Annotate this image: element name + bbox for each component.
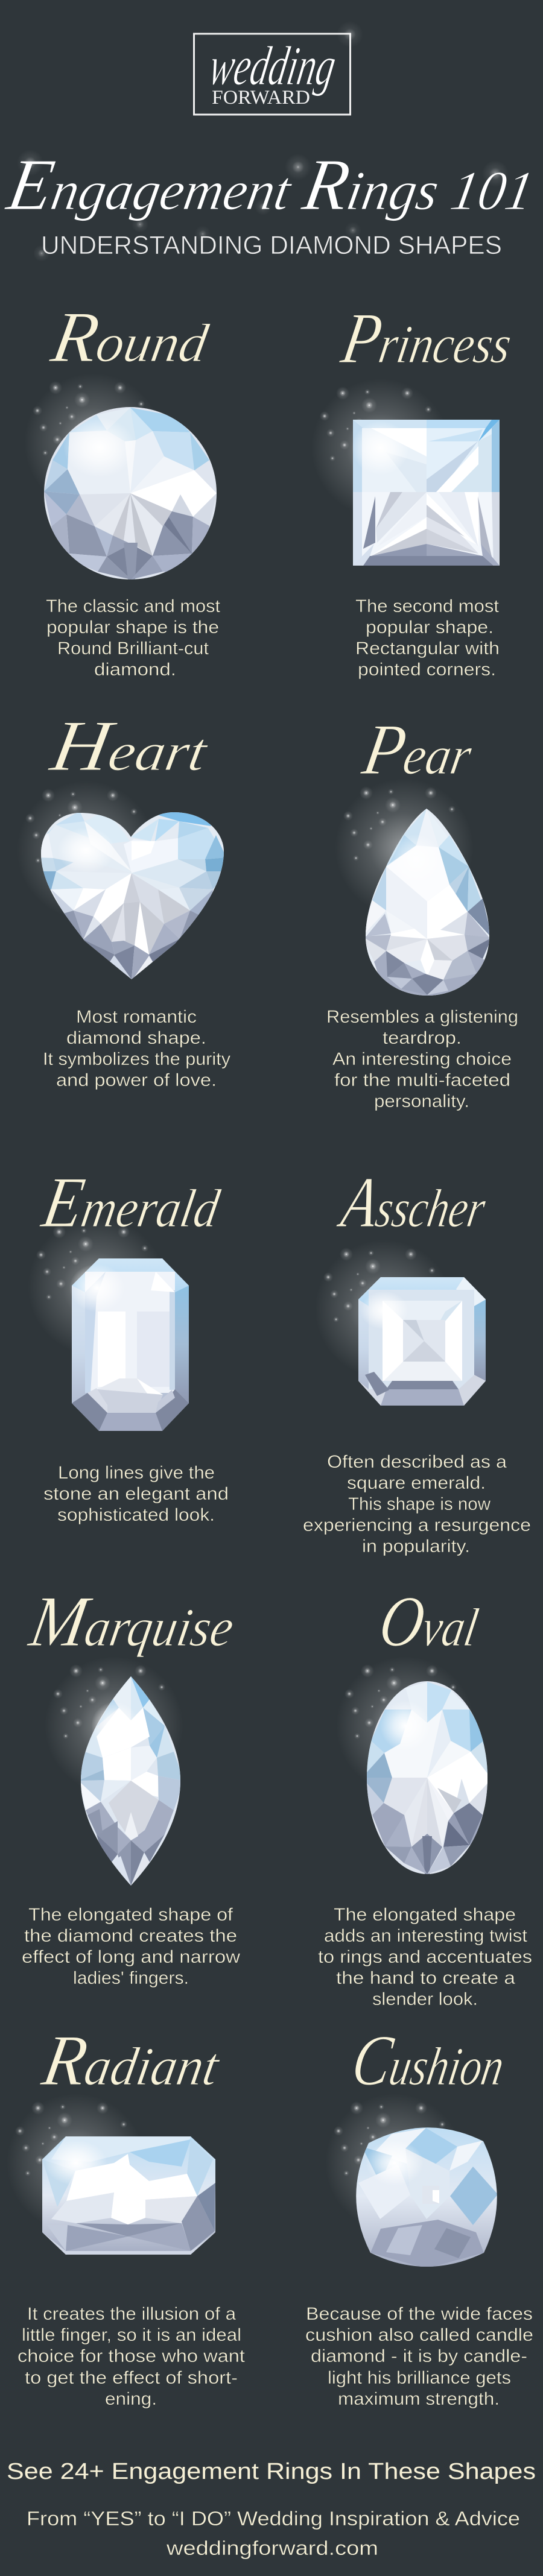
description: asscher: in popularity. [362,1536,470,1556]
description: marquise: the diamond creates the [24,1926,237,1946]
heading: pear: Pear [357,710,479,790]
highlight [57,827,115,873]
heading: marquise: Marquise [23,1582,241,1662]
description: cushion: maximum strength. [338,2389,500,2409]
panel: heart [17,706,230,1090]
description: marquise: The elongated shape of [28,1905,233,1925]
heading: asscher: Asscher [333,1163,493,1243]
description: cushion: cushion also called candle [305,2325,533,2345]
logo: wedding forward: wedding [205,36,340,97]
highlight [380,1700,431,1751]
panel: round [24,297,221,680]
panel: radiant [7,2021,246,2409]
heading: cushion: Cushion [346,2021,512,2101]
subtitle: UNDERSTANDING DIAMOND SHAPES [41,231,502,260]
panel: pear [326,710,518,1111]
description: marquise [22,1905,240,1988]
description: princess: The second most [355,596,500,616]
description: radiant: to get the effect of short- [25,2368,238,2388]
description: pear: An interesting choice [332,1049,512,1069]
description: cushion [305,2304,533,2409]
heading: oval: Oval [373,1582,486,1662]
description: cushion: light his brilliance gets [328,2368,511,2388]
description: emerald: Long lines give the [58,1463,215,1483]
description: emerald: stone an elegant and [43,1484,229,1504]
title sparkles [17,150,509,262]
description: oval: adds an interesting twist [324,1926,528,1946]
description: oval: The elongated shape [334,1905,516,1925]
description: asscher [303,1452,531,1556]
description: oval: the hand to create a [336,1968,515,1988]
description: round [46,596,221,680]
icon: princess diamond [353,420,500,566]
highlight [391,834,442,885]
description: marquise: effect of long and narrow [22,1947,240,1967]
highlight [366,2140,424,2186]
description: radiant: ening. [105,2389,157,2409]
description: heart: Most romantic [76,1007,197,1027]
highlight [352,421,410,475]
description: heart [43,1007,230,1090]
description: princess [355,596,500,680]
title: Engagement Rings 101 [1,144,541,226]
panel: oval [318,1582,532,2009]
heading: princess: Princess [335,298,519,379]
description: asscher: square emerald. [347,1473,486,1493]
description: princess: popular shape. [366,617,494,637]
description: radiant [17,2304,246,2409]
icon: marquise diamond [78,1673,184,1887]
description: asscher: This shape is now [348,1494,491,1514]
description: princess: pointed corners. [358,660,496,680]
highlight [360,1291,408,1330]
icon: round diamond [42,404,220,582]
call to action: See 24+ Engagement Rings In These Shapes [7,2459,536,2484]
description: round: Round Brilliant-cut [57,639,209,658]
highlight [69,1264,125,1312]
description: pear: Resembles a glistening [326,1007,518,1027]
description: radiant: It creates the illusion of a [27,2304,236,2324]
description: radiant: little finger, so it is an ideal [22,2325,241,2345]
heading: emerald: Emerald [36,1163,227,1243]
description: asscher: Often described as a [327,1452,507,1472]
website: weddingforward.com [166,2537,378,2559]
icon: asscher diamond [358,1277,486,1406]
panel: cushion [305,2021,533,2409]
description: round: popular shape is the [46,617,219,637]
panel: emerald [28,1163,229,1525]
description: marquise: ladies' fingers. [73,1968,189,1988]
description: asscher: experiencing a resurgence [303,1515,531,1535]
icon: emerald diamond [72,1258,189,1431]
description: pear: teardrop. [383,1028,462,1048]
heading: round: Round [45,297,215,377]
panel: marquise [22,1582,241,1988]
icon: radiant diamond [42,2136,215,2255]
description: heart: It symbolizes the purity [43,1049,230,1069]
icon: cushion diamond [353,2123,501,2270]
icon: oval diamond [362,1679,492,1878]
description: princess: Rectangular with [355,639,500,658]
description: emerald [43,1463,229,1525]
description: heart: and power of love. [56,1070,217,1090]
description: cushion: diamond - it is by candle- [311,2346,527,2366]
panel: asscher [303,1163,531,1556]
description: emerald: sophisticated look. [57,1505,215,1525]
highlight [91,1702,139,1750]
panel: princess [311,298,519,680]
highlight [45,2140,107,2186]
tagline: From “YES” to “I DO” Wedding Inspiration & Advice [27,2507,520,2530]
logo: wedding forward [194,21,363,115]
description: cushion: Because of the wide faces [306,2304,533,2324]
highlight [63,417,136,478]
description: round: The classic and most [46,596,221,616]
description: oval: slender look. [372,1989,478,2009]
description: pear: for the multi-faceted [334,1070,510,1090]
description: oval: to rings and accentuates [318,1947,532,1967]
description: pear [326,1007,518,1111]
logo: wedding forward: FORWARD [212,87,310,109]
description: pear: personality. [374,1091,469,1111]
description: round: diamond. [94,660,176,680]
heading: heart: Heart [44,706,216,786]
description: heart: diamond shape. [66,1028,206,1048]
heading: radiant: Radiant [36,2021,227,2101]
description: radiant: choice for those who want [17,2346,246,2366]
icon: pear diamond [362,805,492,998]
description: oval [318,1905,532,2009]
icon: heart diamond [36,808,229,983]
